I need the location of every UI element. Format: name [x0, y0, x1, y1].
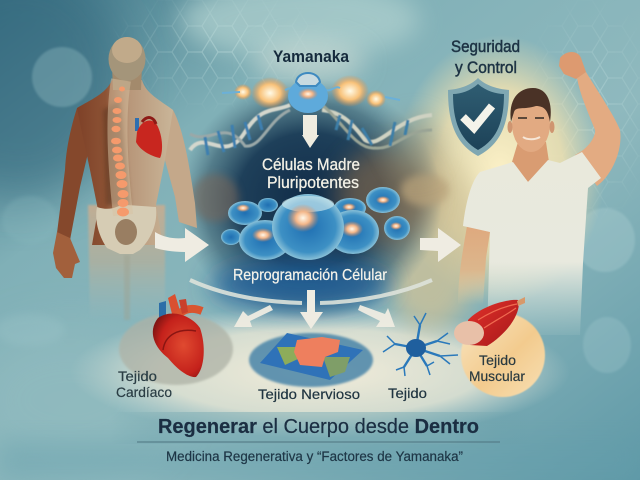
neck — [112, 66, 142, 90]
label: Muscular — [469, 368, 525, 384]
left arm — [458, 226, 490, 305]
pelvis — [96, 205, 156, 254]
label: Tejido — [479, 352, 516, 368]
fist — [559, 52, 586, 79]
label: Tejido Nervioso — [258, 386, 360, 402]
neck — [512, 142, 549, 182]
shirt — [463, 152, 601, 335]
label: Cardíaco — [116, 384, 172, 400]
heading: Seguridad y Control — [451, 37, 520, 77]
icon: big heart — [153, 294, 204, 377]
arrows to tissues — [234, 290, 395, 329]
hand — [53, 232, 80, 278]
heading: Células Madre Pluripotentes: Pluripotentes — [267, 173, 359, 192]
hair — [510, 88, 551, 122]
icon: muscle — [454, 297, 525, 346]
label: Tejido — [388, 385, 427, 401]
anatomical figure: back view with spine and heart — [53, 37, 197, 320]
heading: Células Madre Pluripotentes: Células Madre — [262, 155, 360, 174]
icon: neuron — [383, 313, 458, 376]
title band — [110, 412, 530, 444]
DNA helix right — [322, 105, 432, 148]
DNA helix left — [190, 105, 290, 155]
panel: cardiac tissue — [116, 294, 233, 400]
back muscle — [103, 100, 130, 205]
heading: Reprogramación Célular: Reprogramación Célular — [233, 267, 388, 284]
arrow: cells to healthy man — [420, 228, 461, 262]
arrow: down from Yamanaka — [302, 115, 319, 148]
main title: Regenerar el Cuerpo desde Dentro — [158, 416, 479, 438]
head — [512, 96, 550, 152]
heading: Seguridad y Control: y Control — [455, 58, 517, 77]
label — [116, 368, 172, 400]
healthy man — [458, 52, 620, 335]
icon: shield with check — [448, 78, 509, 156]
arrow: body to cells — [155, 228, 209, 262]
raised arm — [575, 72, 620, 186]
pluripotent stem cells cluster — [221, 187, 410, 260]
panel: neuron tissue — [383, 313, 458, 401]
torso — [77, 80, 173, 245]
label: Tejido — [118, 368, 157, 384]
heading: Seguridad y Control: Seguridad — [451, 37, 520, 56]
subtitle: Medicina Regenerativa y “Factores de Yamanaka” — [166, 449, 463, 464]
arm muscular left — [57, 108, 100, 240]
panel: nerve tissue — [249, 333, 373, 402]
arm right — [163, 106, 197, 228]
head — [108, 37, 146, 81]
panel: muscle tissue — [454, 297, 545, 397]
spine — [111, 80, 129, 216]
face — [518, 117, 544, 119]
heading: Células Madre Pluripotentes — [262, 155, 360, 192]
Yamanaka factors: top cell with sparks — [222, 73, 400, 113]
legs — [88, 205, 165, 320]
title: Yamanaka: Yamanaka — [273, 47, 349, 66]
curved band under reprogramming — [190, 280, 432, 303]
label — [469, 352, 525, 384]
small heart — [135, 118, 162, 158]
